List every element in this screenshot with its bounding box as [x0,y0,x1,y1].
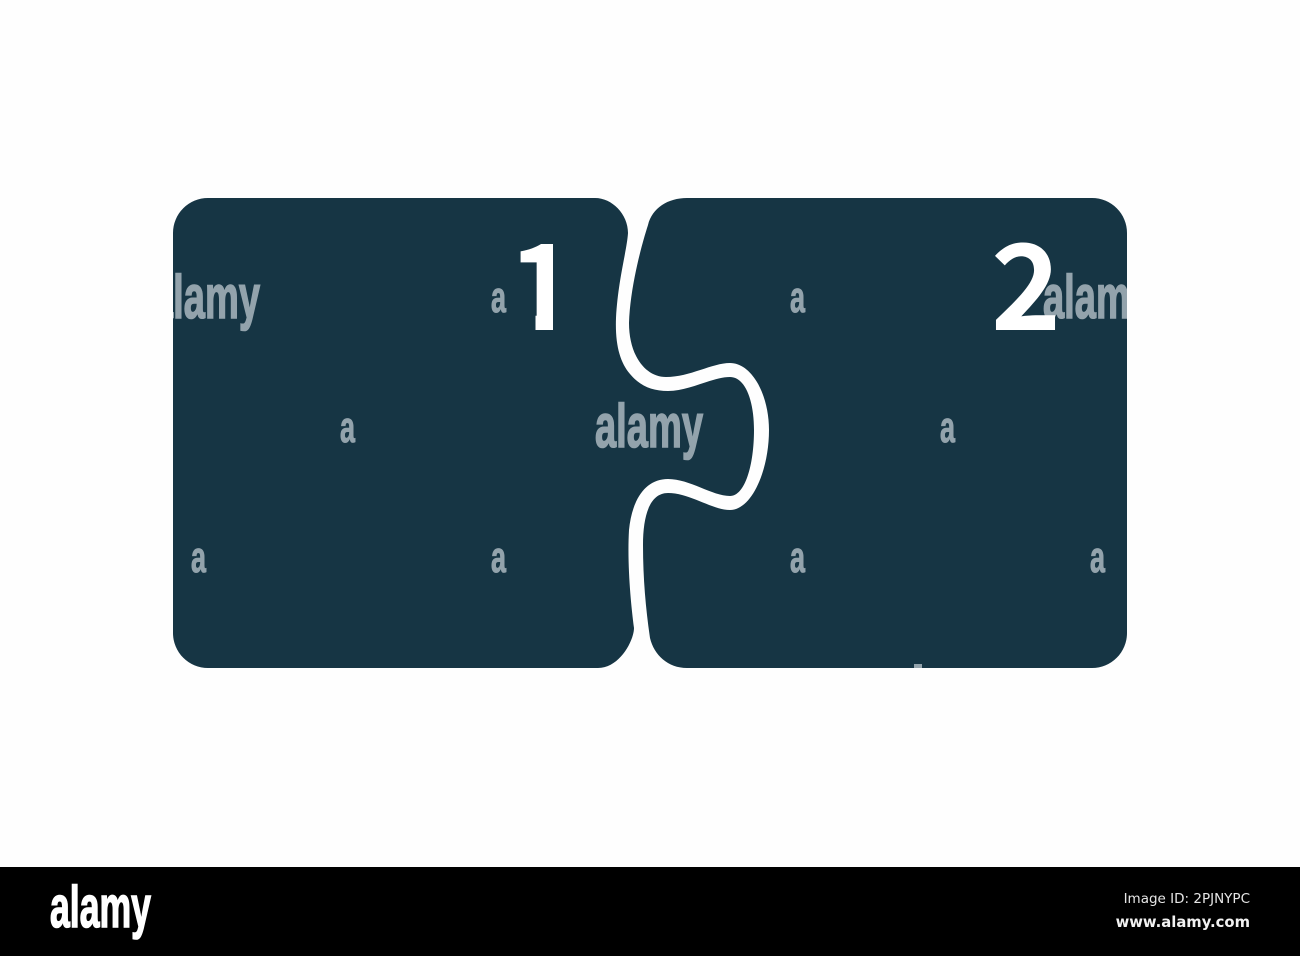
watermark fragment at bottom edge [914,664,922,668]
footer logo: alamy [50,875,151,940]
watermarks: a [1090,533,1105,582]
watermarks: a [491,273,506,322]
watermarks: alamy [1043,263,1151,331]
watermarks: a [491,533,506,582]
watermarks: a [940,403,955,452]
image id: Image ID: 2PJNYPC [1124,891,1250,907]
infographic canvas [0,198,1300,956]
puzzle piece 2 [629,198,1127,668]
website: www.alamy.com [1116,914,1250,931]
watermarks [173,272,1127,573]
watermarks: alamy [152,263,260,331]
number 2: 2 [991,193,1061,365]
puzzle piece 1 [173,198,754,668]
watermarks: a [790,273,805,322]
watermarks: a [191,533,206,582]
number 1: 1 [508,193,578,365]
watermarks: alamy [595,392,703,460]
footer bar [0,867,1300,956]
watermarks: a [340,403,355,452]
watermarks: a [790,533,805,582]
